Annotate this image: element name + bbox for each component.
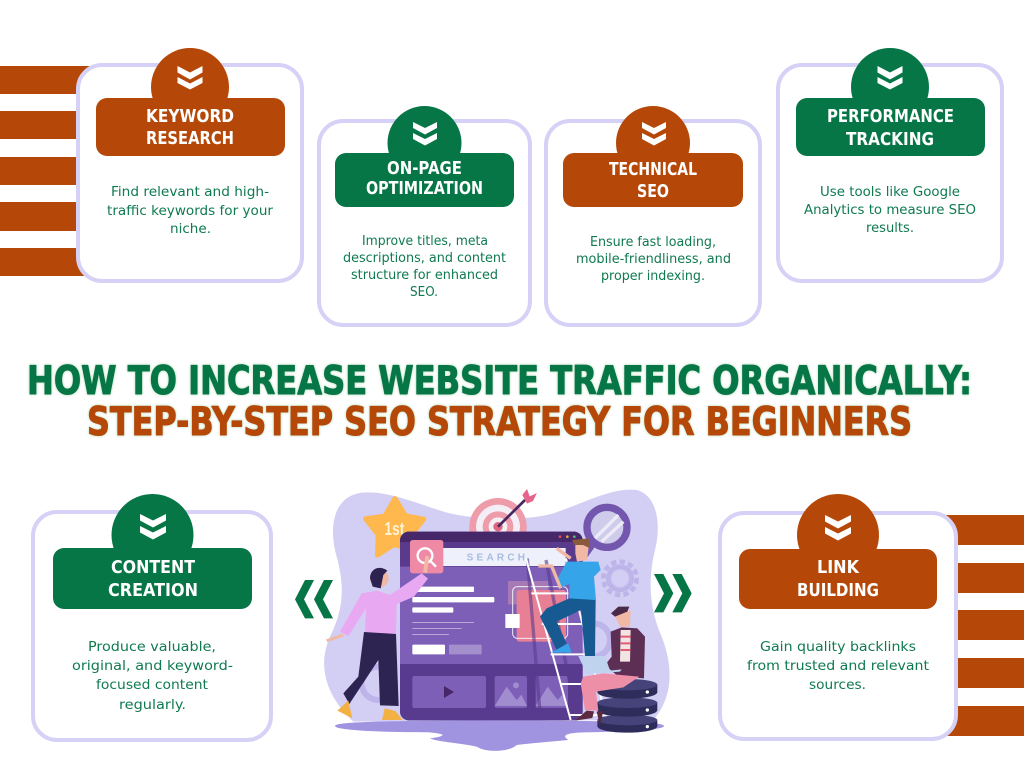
text: technical seo description: Ensure fast loading, [590,235,716,250]
text: link building description: from trusted and relevant [747,659,929,674]
text: technical seo description: mobile-friendliness, and [576,252,731,267]
star: 1st [365,498,424,555]
text: link building description: Gain quality backlinks [760,640,916,655]
icon: double chevron [825,515,851,540]
text: performance tracking description: results. [866,221,914,236]
heading: keyword research [146,106,234,149]
icon: double chevron [413,122,437,146]
text: keyword research description: Find relevant and high- [111,185,269,200]
search bar: SEARCH [467,552,525,563]
heading: link building: BUILDING [797,580,879,601]
text: link building description [747,640,929,693]
heading: technical seo: TECHNICAL [609,159,697,180]
person: seated man with laptop [575,607,645,726]
heading: technical seo [609,159,697,202]
highlighted card [505,581,568,642]
heading: content creation: CREATION [108,580,198,601]
text: on-page description: structure for enhanced [351,268,498,283]
ground shadow [335,721,664,751]
heading: technical seo: SEO [637,181,669,202]
person: woman left [327,556,428,720]
lavender blob background [324,490,670,722]
panel: technical seo [546,106,760,325]
arrow: left chevrons [295,580,333,618]
decorative stripes: right [940,515,1024,736]
panel: link building [720,494,956,739]
text: content creation description: Produce valuable, [88,640,216,655]
text: content creation description: regularly. [119,698,186,713]
icon: double chevron [878,66,902,90]
badge: technical seo [563,106,743,207]
text: on-page description: descriptions, and content [343,251,506,266]
heading: on-page optimization: ON-PAGE [387,158,462,179]
title [27,359,972,445]
panel: keyword research [78,48,302,281]
heading: link building [797,557,879,601]
browser window [400,532,583,720]
panel: on-page optimization [319,106,530,325]
heading: content creation [108,557,198,601]
decorative stripes: left [0,66,90,276]
heading: keyword research: KEYWORD [146,106,234,127]
badge: content creation [53,494,252,609]
icon: double chevron [178,66,202,90]
text: performance tracking description: Use tools like Google [820,185,960,200]
icon: double chevron [642,122,666,146]
text: keyword research description: traffic keywords for your [107,204,274,219]
text: content creation description [72,640,233,713]
badge: performance tracking [796,48,985,156]
badge: on-page optimization [335,106,514,207]
arrow: right chevrons [654,574,692,612]
heading: link building: LINK [817,557,860,578]
badge: link building [739,494,937,609]
text: performance tracking description: Analytics to measure SEO [804,203,976,218]
server stack [597,679,657,733]
heading: performance tracking [827,106,954,150]
text: on-page description: SEO. [410,285,438,300]
heading: content creation: CONTENT [111,557,196,578]
panel: content creation [33,494,271,740]
text: performance tracking description [804,185,976,236]
heading: keyword research: RESEARCH [146,128,234,149]
heading: on-page optimization: OPTIMIZATION [366,178,483,199]
badge: keyword research [96,48,285,156]
panel: performance tracking [778,48,1002,281]
text: keyword research description [107,185,274,237]
magnifying glass [585,507,627,555]
search bar [410,540,566,573]
media thumbnails [412,676,568,708]
gears [362,562,637,700]
ladder [526,558,607,720]
text: on-page description: Improve titles, meta [362,234,488,249]
heading: on-page optimization [366,158,483,199]
text: technical seo description: proper indexing. [601,269,705,284]
page text lines [412,587,494,654]
text: content creation description: original, and keyword- [72,659,233,674]
heading: performance tracking: TRACKING [846,129,934,150]
person: man on ladder [538,538,601,656]
target [469,489,537,555]
star: 1st: 1st [384,518,404,539]
heading: performance tracking: PERFORMANCE [827,106,954,127]
text: link building description: sources. [809,678,866,693]
text: on-page description [343,234,506,300]
text: technical seo description [576,235,731,284]
text: keyword research description: niche. [170,222,211,237]
icon: double chevron [140,514,166,540]
illustration: SEO team building a search page [324,489,670,751]
text: content creation description: focused content [96,678,208,693]
